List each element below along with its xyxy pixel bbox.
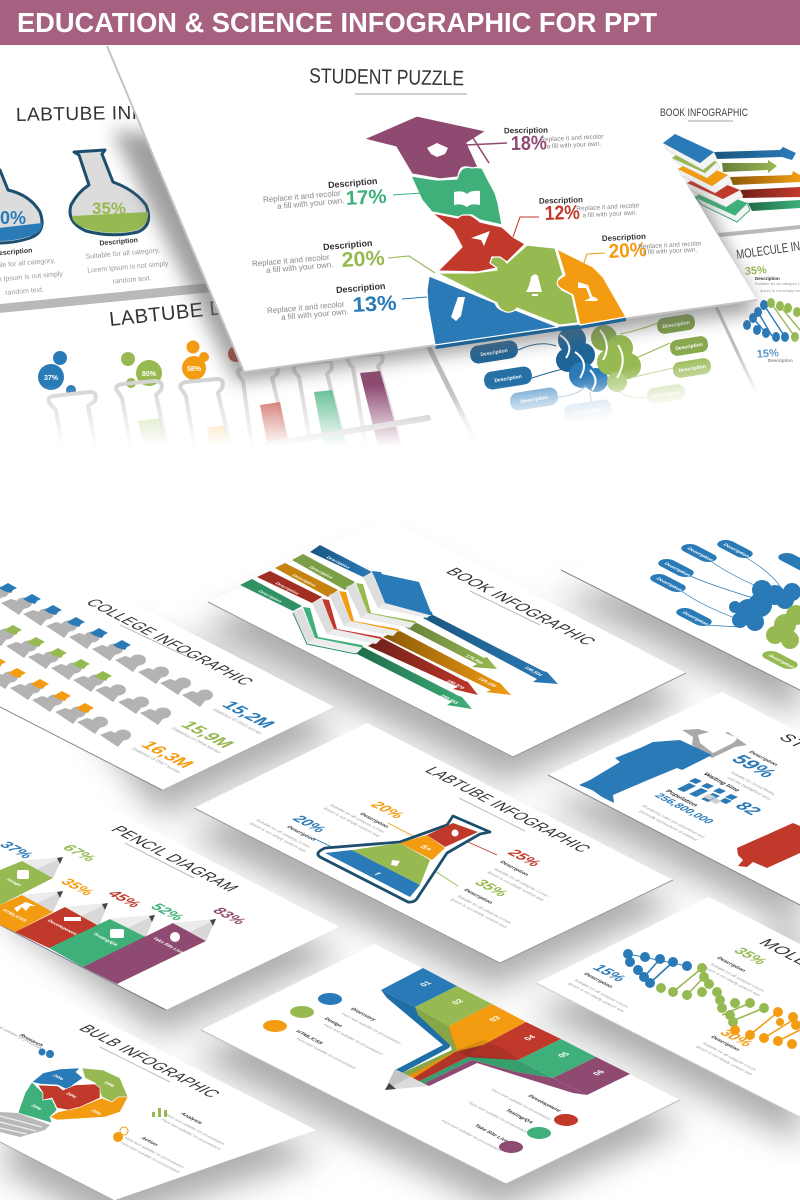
callout: 35 percent: Suitable for all category Lorem [709, 963, 766, 992]
labels: step numbers: 03 [487, 1015, 503, 1023]
icon: blue flask [0, 170, 42, 243]
chart: people rows [0, 586, 213, 747]
piece: orange [50, 1097, 128, 1120]
labels: brain pills: Description [662, 320, 690, 330]
callout: 13 percent: 13% [352, 292, 398, 317]
icon: paper plane [471, 231, 490, 246]
labels: brain pills: Description [652, 390, 680, 400]
panel: brain slide [561, 497, 800, 690]
icons: puzzle icons [427, 143, 598, 321]
text: flask captions: random text. [112, 275, 152, 285]
callout: 20 percent orange: Suitable for all category, Lorem [328, 803, 387, 833]
callout: 20 percent orange: Ipsum is not simply random text. [322, 807, 382, 838]
text: action: Here text suitable for presentation [119, 1141, 182, 1174]
callout: 35 percent [703, 946, 771, 997]
labels: step numbers: 05 [556, 1051, 572, 1059]
stat: 59 percent: Description [747, 750, 780, 767]
labels: step numbers: 04 [522, 1034, 538, 1042]
callout: 25 percent: 25% [503, 848, 545, 869]
callout: 17 percent [263, 176, 387, 211]
labels: arrow values [438, 654, 544, 705]
piece: light green [82, 1068, 128, 1102]
callout: 15 percent [567, 963, 630, 1013]
callout: 20 percent right: Description [602, 232, 646, 243]
underline [688, 120, 733, 122]
callout: 17 percent: a fill with your own. [277, 196, 345, 211]
text: step descriptions: Here text suitable for presentation [490, 1088, 553, 1121]
callout: 13 percent: Description [336, 281, 386, 295]
callout: 30 percent: Description [709, 1035, 742, 1052]
chart: mini book stack [663, 134, 750, 222]
labels: arrow values: 230,504 [522, 666, 544, 677]
chart: description stubs: Description [325, 556, 352, 569]
callout: 12 percent: a fill with your own. [582, 210, 638, 219]
callout: 30 percent: Ipsum is not simply random text [695, 1045, 755, 1076]
labels: arrow values: 175,060 [463, 654, 485, 665]
stat: 59 percent: and the highlighted story [726, 776, 773, 801]
callout: 15 percent: Suitable for all category Lorem [573, 979, 630, 1008]
callout: 30 percent: 30% [715, 1028, 757, 1049]
heading: labtube inf: LABTUBE INF [16, 103, 144, 126]
panel: student puzzle slide [107, 46, 757, 372]
chart: puzzle student [364, 116, 626, 349]
chart: dna mini [743, 298, 800, 342]
text: flask captions: random text. [5, 287, 44, 297]
heading: labtube infographic: LABTUBE INFOGRAPHIC [420, 765, 595, 855]
callout: 35 percent: 35% [470, 878, 512, 899]
callout: 35 percent: 35% [729, 946, 771, 967]
heading: book infographic: BOOK INFOGRAPHIC [660, 107, 748, 119]
labels: bulb percents: 20% [64, 1092, 79, 1099]
piece: red [38, 1084, 100, 1110]
labels: brain pills: Description [494, 374, 522, 384]
callout: 17 percent: Description [328, 176, 378, 190]
callout: 15 percent: Description [582, 972, 615, 989]
heading: labtube d: LABTUBE D [108, 297, 226, 331]
heading: book infographic: BOOK INFOGRAPHIC [441, 566, 601, 647]
labels: brain pills: Description [574, 407, 602, 417]
labels: pencil percentages: 35% [56, 877, 98, 898]
callout: 17 percent: Replace it and recolor [263, 189, 341, 204]
callout: 35 percent: Ipsum is not simply random text. [449, 898, 509, 929]
underline [459, 798, 525, 831]
callout: 12 percent: Replace it and recolor [576, 202, 641, 213]
icon: analysis [152, 1108, 167, 1117]
labels: brain pills: Description [721, 543, 751, 558]
chart: test tube bubbles: 37% [44, 375, 59, 382]
text: step descriptions: Take Site Live [472, 1124, 510, 1143]
stat: 82: 82 [731, 800, 766, 817]
callout: 20 percent blue: Suitable for all category, Lorem [254, 818, 313, 848]
stat: population: 256,800,000 [651, 792, 716, 825]
stat: 15.9M: Statistics of 2016 survey [169, 727, 223, 755]
labels: bulb percents: 20% [89, 1109, 104, 1116]
icons: flask icons [372, 830, 458, 877]
text: waiting time: Waiting time [701, 772, 742, 793]
panel: bulb infographic [0, 973, 316, 1200]
stat: population: generally transactions at minimal [638, 810, 699, 841]
labels: brain pills [469, 313, 712, 424]
chart: test tube bubbles [38, 340, 244, 395]
chart: description stubs [240, 545, 372, 611]
labels: brain pills: Description [685, 547, 715, 562]
labels: bulb percents: 20% [102, 1081, 117, 1088]
callout: 18 percent: Description [504, 126, 548, 135]
callout: 20 percent blue: Ipsum is not simply random text. [248, 822, 308, 853]
text: step descriptions: Here text suitable for presentation [440, 1119, 503, 1152]
icon: red graduate [737, 823, 800, 868]
labels: pencil percentages [0, 840, 250, 927]
stat: 15.9M: 15,9M [176, 719, 239, 750]
labels: arrow values: 180,079 [444, 679, 466, 690]
callout: 20 percent left: Replace it and recolor [252, 253, 330, 268]
underline [120, 625, 190, 658]
labels: bulb percents: 20% [51, 1074, 66, 1081]
piece: blue [32, 1068, 83, 1090]
icon: pencil [451, 297, 465, 321]
chart: test tube bubbles: 58% [187, 366, 202, 373]
chart: description stubs: Description [308, 566, 335, 579]
text: step descriptions: Here text suitable for presentation [322, 1023, 385, 1056]
panel: pencil diagram [0, 770, 339, 1010]
callout: 25 percent: Ipsum is not simply random text. [486, 871, 546, 902]
icon: blue flask: 0% [0, 208, 26, 228]
text: step descriptions [294, 1007, 562, 1152]
heading: college infographic: COLLEGE INFOGRAPHIC [81, 597, 258, 688]
text: analysis: Here text suitable for presentation [160, 1118, 223, 1151]
puzzle piece: green [411, 167, 502, 225]
labels: arrow values: 200,853 [438, 694, 460, 705]
callout: 35 percent: Ipsum is not simply random text [703, 966, 763, 997]
labels: brain pills: Description [766, 654, 796, 669]
chart: dna orange [730, 1007, 800, 1049]
icons: step circles [258, 991, 583, 1155]
stat: 16.3M: Statistics of 2017 survey [129, 747, 183, 775]
callout: 30 percent: Suitable for all category Lorem [701, 1042, 758, 1071]
labels: pencil percentages: 45% [103, 889, 145, 910]
stat: population [638, 789, 716, 841]
panel: book infographic [208, 518, 686, 757]
chart: book arrows [355, 615, 558, 709]
text: step descriptions: Here text suitable for presentation [467, 1101, 530, 1134]
callout: 35 percent: Suitable for all category, Lorem [455, 894, 514, 924]
underline [470, 591, 540, 625]
puzzle piece: purple cap [364, 116, 486, 179]
callout: 20 percent left [252, 238, 386, 275]
callout: 20 percent orange: 20% [366, 800, 408, 821]
connectors: callout lines [388, 193, 605, 299]
panel: book slide mini (back right) [610, 45, 800, 237]
callout: 18 percent: a fill with your own. [546, 141, 602, 150]
text: step descriptions: Here text suitable for presentation [295, 1037, 358, 1070]
icon: pencil tip [385, 1069, 429, 1090]
chart: test tube bubbles: 80% [142, 371, 157, 378]
rack bar [262, 418, 428, 446]
callout: 30 percent [695, 1028, 758, 1076]
panel: student slide [548, 692, 800, 905]
panel: labtube diagram slide (back left lower) [0, 292, 480, 470]
stat: 15.2M: 15,2M [217, 699, 280, 730]
callout: 20 percent left: 20% [341, 247, 386, 272]
icons: pencil icons [14, 870, 180, 942]
chart: step blocks [381, 968, 630, 1095]
callout: 12 percent: Description [539, 195, 583, 206]
heading: pencil diagram: PENCIL DIAGRAM [106, 824, 243, 894]
chart: test tube liquids [138, 371, 408, 470]
fade: left to white [0, 370, 800, 490]
chart: graduation caps [0, 583, 131, 713]
chart: flask [318, 816, 490, 902]
labels: step numbers: 06 [591, 1069, 607, 1077]
chart: blue brain [729, 580, 800, 631]
callout: 35 percent: Description [715, 956, 748, 973]
callout: 25 percent: Suitable for all category, Lorem [492, 867, 551, 897]
text: description mini [755, 276, 800, 293]
stat: population: Population [663, 789, 699, 808]
text: research: Research [17, 1034, 45, 1048]
panel: college infographic [0, 550, 334, 790]
callout: 20 percent blue: 20% [288, 814, 330, 835]
text: step descriptions: Testing/QA [503, 1109, 534, 1125]
chart: bulb base [0, 1112, 50, 1137]
underline [100, 1047, 170, 1082]
icon: green flask [70, 150, 149, 235]
callout: 20 percent orange [322, 800, 408, 838]
callout: 20 percent right: Replace it and recolor [638, 240, 703, 251]
labels: brain pills [647, 538, 800, 671]
labels: brain pills: Description [480, 348, 508, 358]
callout: 18 percent: Replace it and recolor [540, 133, 605, 144]
text: analysis: Here text suitable for presentation [164, 1113, 227, 1146]
text: step descriptions: Discovery [349, 1007, 378, 1022]
labels: brain pills: Description [680, 611, 710, 626]
panel: labtube flask slide (back left) [0, 45, 213, 313]
text: action: Action [139, 1136, 160, 1147]
labels: step numbers: 01 [418, 980, 434, 988]
callout: 20 percent right [602, 232, 703, 263]
callout: 15 percent: Ipsum is not simply random text [567, 982, 627, 1013]
text: flask captions: Lorem Ipsum is not simply [87, 261, 169, 275]
piece: green [18, 1082, 57, 1123]
chart: dna blue [623, 949, 692, 988]
labels: pencil steps: Take Site Live [151, 937, 185, 955]
icon: bell [526, 274, 542, 296]
stat: 15.2M: Statistics of 2015 survey [210, 708, 264, 736]
chart: mini book arrows [714, 147, 800, 211]
underline [355, 93, 467, 95]
connector lines [313, 823, 497, 886]
icon: book [454, 191, 480, 207]
callout: 20 percent left: Description [323, 238, 373, 252]
labels: brain pills: Description [675, 342, 703, 352]
heading: bulb infographic: BULB INFOGRAPHIC [74, 1023, 225, 1100]
callout: 20 percent blue [248, 814, 330, 853]
text: step descriptions: Here text suitable for presentation [340, 1012, 403, 1045]
stat: 16.3M: 16,3M [136, 739, 199, 770]
callout: 20 percent right: 20% [608, 239, 647, 263]
callout: 13 percent: Replace it and recolor [267, 300, 345, 315]
labels: pencil steps: HTML/CSS [0, 908, 29, 923]
banner title: EDUCATION & SCIENCE INFOGRAPHIC FOR PPT [17, 7, 657, 38]
labels: arrow values: 225,190 [476, 677, 498, 688]
icons: flask icons: S+ [418, 844, 435, 852]
heading: student puzzle: STUDENT PUZZLE [309, 65, 464, 90]
chart: description stubs: Description [274, 582, 301, 595]
icon: action [113, 1127, 128, 1142]
stat: 59 percent [726, 750, 781, 801]
text: step descriptions: Development [526, 1094, 562, 1113]
lines: brain connectors [518, 323, 678, 415]
text: 15 percent: 15% [756, 347, 779, 361]
panel: labtube infographic [194, 723, 673, 963]
chart: bulb puzzle [18, 1068, 128, 1123]
labels: brain pills: Description [662, 562, 692, 577]
chart: green brain [766, 605, 800, 649]
puzzle piece: red [432, 213, 525, 272]
puzzle piece: blue [427, 276, 558, 345]
puzzle edge: blue and orange thickness [435, 317, 626, 349]
labels: step numbers: 02 [450, 998, 466, 1006]
text: 35 percent: 35% [744, 264, 767, 278]
chart: description stubs: Description [257, 590, 284, 603]
text: analysis: Analysis [178, 1112, 204, 1125]
callout: 12 percent [539, 195, 641, 225]
callout: 13 percent [267, 281, 398, 322]
labels: step numbers [418, 980, 607, 1077]
shading: ribbon fold [457, 1040, 518, 1060]
labels: pencil percentages: 67% [58, 843, 100, 864]
labels: brain pills: Description [520, 395, 548, 405]
text: action: Here text suitable for presentation [123, 1136, 186, 1169]
labels: pencil percentages: 52% [146, 902, 188, 923]
text: flask captions: Description [99, 237, 138, 247]
labels: brain pills: Description [678, 364, 706, 374]
chart: test tubes [49, 354, 408, 470]
panel: molecule slide [536, 897, 800, 1117]
labels: pencil percentages: 83% [208, 906, 250, 927]
callout: 35 percent: Description [462, 888, 495, 905]
puzzle piece: orange [557, 249, 626, 325]
callout: 20 percent left: a fill with your own. [266, 260, 334, 275]
icon: gray head and arm [682, 729, 747, 758]
labels: pencil steps: Testing/QA [91, 932, 120, 947]
fade: right to white [440, 280, 800, 490]
chart: blue checker icons [677, 778, 738, 804]
callout: 18 percent: 18% [511, 132, 547, 155]
text: flask captions [0, 235, 171, 299]
chart: description stubs: Description [291, 574, 318, 587]
icons: flask icons: f [372, 871, 383, 877]
callout: 20 percent blue: Description [285, 825, 318, 842]
icon: blue graduate [579, 740, 712, 803]
text: step descriptions: Design [322, 1017, 344, 1028]
callout: 20 percent right: a fill with your own. [642, 247, 698, 256]
chart: ribbons [381, 990, 587, 1095]
underline [125, 843, 194, 878]
chart: chevron books [293, 571, 433, 654]
text: flask captions: Suitable for all category, [85, 247, 160, 261]
callout: 25 percent [486, 848, 551, 902]
icon: green flask: 35% [92, 199, 126, 218]
shadow: bottom slides [0, 548, 800, 1200]
panel: pencil path steps [201, 944, 680, 1184]
labels: brain pills: Description [654, 577, 684, 592]
icon: research [38, 1048, 54, 1058]
callout: 12 percent: 12% [544, 202, 580, 225]
callout: 20 percent orange: Description [358, 812, 391, 829]
icon: cap [427, 143, 448, 157]
callout: 18 percent [504, 126, 605, 155]
callout: 15 percent: 15% [588, 963, 630, 984]
panel: brain slide (back) [426, 300, 770, 450]
icon: lamp [578, 282, 598, 301]
lines: connectors [680, 557, 782, 627]
panel: molecule slide mini (back right) [715, 232, 800, 420]
stat: population: Of industry rates are advertised and [640, 804, 707, 839]
stat: 59 percent: 59% [726, 753, 781, 780]
callout: 25 percent: Description [498, 860, 531, 877]
callout: 35 percent [449, 878, 514, 929]
text: description mini: Description [755, 276, 780, 281]
callout: 17 percent: 17% [345, 186, 387, 210]
chart: pencil bars [0, 857, 216, 984]
shadow: student puzzle slide [112, 130, 757, 382]
puzzle piece: light green [437, 245, 578, 325]
chart: brain [556, 325, 641, 392]
tassel [466, 138, 507, 163]
labels: pencil steps [0, 878, 185, 955]
stat: 59 percent: Suitable for Social Media, [729, 771, 778, 796]
labels: bulb percents: 20% [29, 1104, 44, 1111]
banner [0, 0, 800, 45]
chart: dna green [656, 963, 769, 1027]
text: description mini 2: Description [768, 358, 793, 363]
labels: pencil steps: Image [5, 878, 23, 887]
callout: 13 percent: a fill with your own. [281, 307, 349, 322]
text: step descriptions: HTML/CSS [294, 1030, 324, 1045]
labels: pencil steps: Development [45, 919, 79, 936]
labels: bulb percents [29, 1074, 117, 1116]
